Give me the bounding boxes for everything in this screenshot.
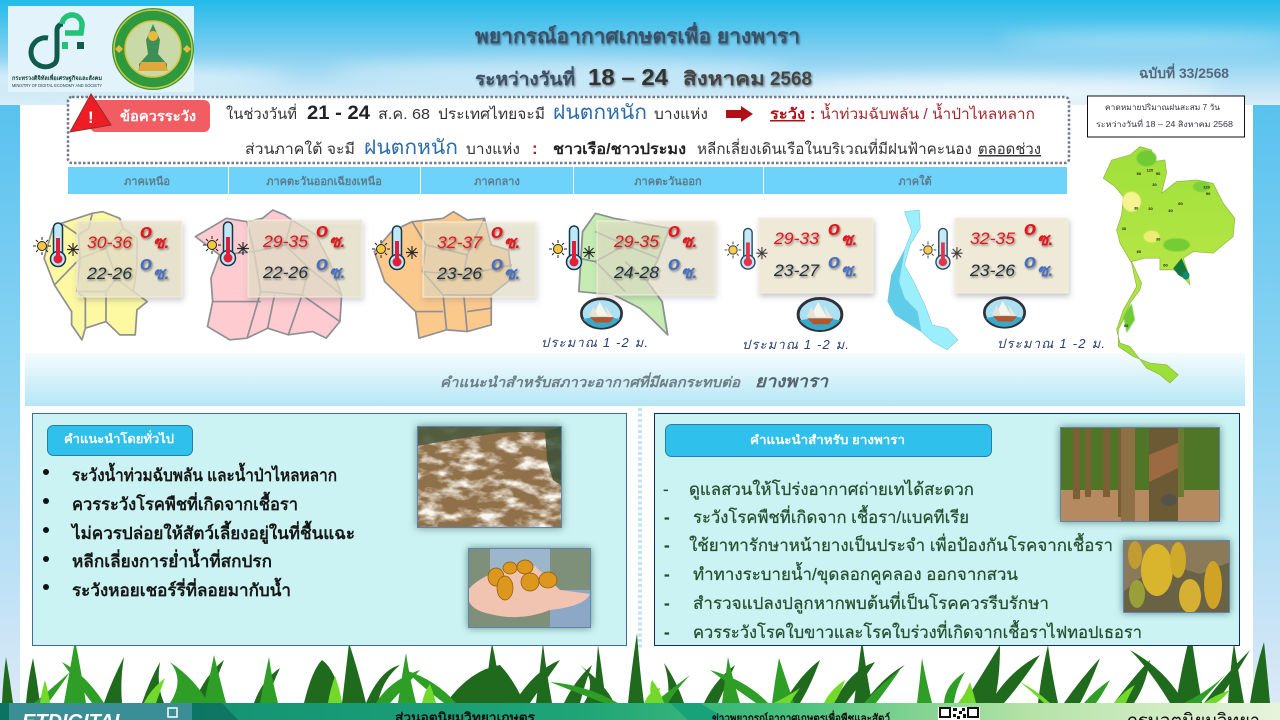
warning line two — [245, 137, 1041, 159]
temperature: northeast: 29-35 — [262, 232, 309, 251]
temperature: east: 29-35 — [613, 232, 660, 251]
photo: rubber tree tapping — [1060, 427, 1220, 522]
title: 2568 — [770, 69, 812, 90]
photo: flood water — [417, 426, 562, 528]
rubber advice list: - — [664, 565, 670, 584]
rainfall map of Thailand: 60 — [1178, 201, 1183, 206]
temperature: north: o — [140, 253, 152, 275]
warning line one: 21 - 24 — [307, 103, 370, 124]
sea waves: ประมาณ 1 -2 ม. — [541, 335, 648, 350]
temperature: northeast: o — [316, 253, 328, 275]
map: central — [374, 212, 512, 338]
panel: warning — [68, 94, 1069, 163]
temperature: south gulf: ซ. — [841, 230, 857, 249]
rainfall map of Thailand: 90 — [1206, 191, 1211, 196]
legend caption: คาดหมายปริมาณฝนสะสม 7 วัน — [1105, 103, 1221, 112]
temperature: northeast: 22-26 — [262, 263, 309, 282]
rubber advice list: - — [664, 594, 670, 613]
legend caption: ระหว่างวันที่ 18 – 24 สิงหาคม 2568 — [1096, 118, 1234, 129]
rubber advice list: - — [663, 480, 669, 499]
temperature: central: o — [491, 253, 503, 275]
advice banner: ยางพารา — [755, 372, 830, 391]
rainfall map of Thailand: 60 — [1124, 323, 1129, 328]
temperature: north: ซ. — [153, 233, 169, 252]
rubber advice list: - — [664, 536, 670, 555]
icon: QR code — [938, 707, 980, 720]
logo: digital economy ministry: MINISTRY OF DIGITAL ECONOMY AND SOCIETY — [12, 83, 102, 88]
temperature: south andaman — [920, 218, 1068, 293]
temperature: north: o — [140, 221, 152, 243]
rubber advice list: - — [664, 623, 670, 642]
rainfall map of Thailand: 60 — [1163, 263, 1168, 268]
rubber advice list: ดูแลสวนให้โปร่งอากาศถ่ายเทได้สะดวก — [689, 479, 974, 500]
sea waves: ประมาณ 1 -2 ม. — [997, 336, 1105, 351]
general advice heading: คำแนะนำโดยทั่วไป — [64, 430, 174, 446]
region headers: ภาคตะวันออก — [634, 175, 702, 188]
temperature: east — [549, 220, 715, 295]
general advice list: ระวังหอยเชอร์รี่ที่ลอยมากับน้ำ — [72, 577, 291, 600]
warning line two: ชาวเรือ/ชาวประมง — [553, 141, 686, 158]
warning line one: ระวัง — [770, 106, 805, 123]
temperature: south andaman: 23-26 — [969, 261, 1016, 280]
photo: diseased yellow leaves — [1123, 540, 1230, 613]
rainfall map of Thailand: 30 — [1122, 226, 1127, 231]
warning line two: หลีกเลี่ยงเดินเรือในบริเวณที่มีฝนฟ้าคะนอง — [697, 138, 972, 158]
warning line one: ในช่วงวันที่ — [226, 103, 297, 123]
title: 18 – 24 — [588, 64, 668, 90]
temperature: south andaman: ซ. — [1037, 261, 1053, 280]
rainfall map of Thailand: 60 — [1137, 249, 1142, 254]
region headers: ภาคตะวันออกเฉียงเหนือ — [266, 175, 382, 188]
general advice heading — [48, 426, 192, 456]
temperature: north: ซ. — [153, 264, 169, 283]
rainfall map of Thailand: 120 — [1147, 167, 1154, 172]
region headers: ภาคใต้ — [898, 174, 932, 188]
icon: thermometer south gulf — [725, 228, 768, 269]
warning line two: ตลอดช่วง — [978, 141, 1041, 158]
map: north — [44, 212, 147, 340]
warning line one — [226, 102, 1035, 124]
rainfall map of Thailand: 40 — [1168, 208, 1173, 213]
rainfall map of Thailand: 60 — [1137, 171, 1142, 176]
advice banner — [25, 353, 1245, 406]
temperature: central: ซ. — [504, 233, 520, 252]
footer — [0, 703, 1280, 720]
issue number: ฉบับที่ 33/2568 — [1139, 63, 1229, 81]
warning line two: : — [532, 139, 538, 158]
temperature: south andaman: o — [1024, 218, 1036, 240]
warning line one: น้ำท่วมฉับพลัน / น้ำป่าไหลหลาก — [820, 103, 1035, 123]
temperature: east: 24-28 — [613, 263, 660, 282]
temperature: east: ซ. — [681, 263, 697, 282]
advice banner: คำแนะนำสำหรับสภาวะอากาศที่มีผลกระทบต่อ — [440, 372, 742, 390]
rubber advice list: ทำทางระบายน้ำ/ขุดลอกคูคลอง ออกจากสวน — [693, 562, 1018, 585]
warning line one: ส.ค. 68 — [378, 106, 430, 123]
rainfall map of Thailand: 30 — [1148, 206, 1153, 211]
temperature: northeast — [203, 220, 362, 297]
warning line one: ประเทศไทยจะมี — [438, 105, 545, 123]
temperature: central: 23-26 — [436, 264, 483, 283]
region headers: ภาคเหนือ — [124, 175, 170, 188]
temperature: north: 22-26 — [86, 264, 133, 283]
icon: thermometer northeast — [203, 222, 249, 266]
temperature: south andaman: ซ. — [1037, 230, 1053, 249]
sea waves: ประมาณ 1 -2 ม. — [742, 337, 849, 352]
rubber advice list: ใช้ยาทารักษาหน้ายางเป็นประจำ เพื่อป้องกันโรคจากเชื้อรา — [689, 533, 1113, 555]
panel: general advice — [32, 414, 626, 646]
general advice list: ระวังน้ำท่วมฉับพลัน และน้ำป่าไหลหลาก — [72, 462, 337, 485]
region maps — [44, 210, 958, 350]
icon: thermometer east — [549, 226, 595, 270]
legend caption — [1088, 96, 1244, 137]
warning line two: บางแห่ง — [466, 141, 520, 158]
warning line one: บางแห่ง — [654, 106, 708, 123]
temperature: central: ซ. — [504, 264, 520, 283]
panel: rubber advice — [654, 414, 1240, 646]
map: northeast — [195, 210, 342, 340]
photo: golden apple snail eggs in hand — [468, 548, 591, 628]
warning line one: : — [810, 106, 815, 123]
temperature: south gulf: 23-27 — [773, 261, 820, 280]
temperature: northeast: ซ. — [329, 263, 345, 282]
temperature: south gulf: ซ. — [841, 261, 857, 280]
temperature: central: 32-37 — [437, 233, 483, 252]
rubber advice list: ควรระวังโรคใบขาวและโรคใบร่วงที่เกิดจากเชื้อราไฟทอปเธอรา — [693, 620, 1142, 642]
title: ระหว่างวันที่ — [475, 66, 575, 89]
title — [475, 21, 812, 90]
rubber advice list: สำรวจแปลงปลูกหากพบต้นที่เป็นโรคควรรีบรักษา — [693, 591, 1049, 614]
rubber advice heading: คำแนะนำสำหรับ ยางพารา — [750, 433, 905, 447]
temperature: northeast: ซ. — [329, 232, 345, 251]
logo: digital economy ministry — [12, 15, 102, 88]
temperature: south gulf — [725, 218, 873, 293]
warning label: ! — [88, 108, 94, 127]
temperature: south andaman: 32-35 — [970, 229, 1016, 248]
icon: thermometer central — [372, 226, 418, 270]
warning line two: ฝนตกหนัก — [364, 137, 458, 159]
logo: meteorological department emblem — [112, 8, 194, 90]
rainfall map of Thailand: 90 — [1156, 171, 1161, 176]
rainfall map of Thailand: 30 — [1152, 182, 1157, 187]
rainfall map of Thailand: 30 — [1134, 205, 1139, 210]
temperature: south gulf: o — [828, 251, 840, 273]
warning line one: ฝนตกหนัก — [553, 102, 647, 124]
title: พยากรณ์อากาศเกษตรเพื่อ ยางพารา — [475, 21, 800, 48]
rainfall map of Thailand — [1103, 147, 1235, 383]
general advice list: หลีกเลี่ยงการย่ำน้ำที่สกปรก — [72, 548, 272, 571]
region headers: ภาคกลาง — [474, 176, 520, 188]
region headers — [68, 167, 1067, 194]
temperature: east: o — [668, 220, 680, 242]
temperature: south gulf: 29-33 — [773, 229, 820, 248]
temperature: central — [372, 221, 536, 297]
rubber advice list — [663, 479, 1142, 642]
temperature: east: ซ. — [681, 232, 697, 251]
general advice list: ควรระวังโรคพืชที่เกิดจากเชื้อรา — [72, 491, 298, 514]
temperature: south gulf: o — [828, 218, 840, 240]
logo: digital economy ministry: กระทรวงดิจิทัลเพื่อเศรษฐกิจและสังคม — [12, 73, 102, 82]
sea waves — [541, 298, 1105, 352]
warning label: ข้อควรระวัง — [120, 108, 196, 124]
rainfall map of Thailand: 30 — [1156, 237, 1161, 242]
temperature: north: 30-36 — [87, 233, 133, 252]
icon: thermometer north — [33, 223, 79, 266]
temperature: south andaman: o — [1024, 251, 1036, 273]
temperature: central: o — [491, 221, 503, 243]
temperature: north — [33, 221, 182, 297]
digital logo strip — [9, 703, 192, 720]
grass — [2, 632, 1270, 703]
rainfall map of Thailand: 120 — [1203, 184, 1211, 189]
map: east — [579, 213, 670, 335]
general advice list — [43, 462, 355, 600]
rubber advice heading — [666, 424, 992, 456]
warning line two: ส่วนภาคใต้ จะมี — [245, 140, 355, 158]
warning label — [70, 94, 210, 132]
temperature: east: o — [668, 253, 680, 275]
rubber advice list: ระวังโรคพืชที่เกิดจาก เชื้อรา/แบคทีเรีย — [693, 505, 969, 527]
icon: thermometer south andaman — [920, 228, 963, 269]
general advice list: ไม่ควรปล่อยให้สัตว์เลี้ยงอยู่ในที่ชื้นแฉะ — [70, 520, 355, 545]
temperature: northeast: o — [316, 220, 328, 242]
map: south — [888, 210, 958, 350]
rubber advice list: - — [664, 508, 670, 527]
logos — [8, 6, 194, 92]
title: สิงหาคม — [683, 69, 765, 90]
